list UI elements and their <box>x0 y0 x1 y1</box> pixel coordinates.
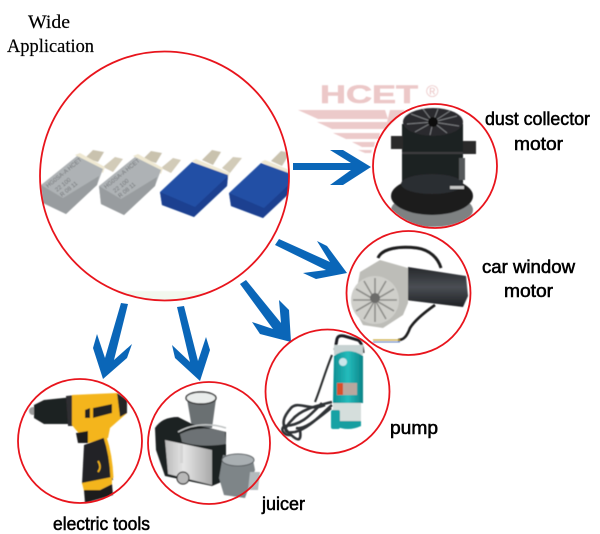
title: Wide <box>28 12 70 33</box>
panel: circuit breakers <box>40 52 311 301</box>
gray breaker one: HG0SA-A HCET <box>45 157 84 190</box>
red ring <box>148 382 270 504</box>
arrow: to car window motor <box>275 239 347 279</box>
label: electric tools: electric tools <box>53 514 150 534</box>
red ring <box>40 52 289 300</box>
blue breaker two <box>228 150 288 219</box>
gray breaker two <box>99 151 181 215</box>
label: dust collector motor: motor <box>514 134 563 154</box>
watermark: HCET logo <box>298 81 439 153</box>
motor illustration <box>391 108 476 227</box>
gray breaker two: R 08 11 <box>117 182 138 200</box>
blue breaker one <box>160 150 242 217</box>
title <box>7 12 94 57</box>
label: car window motor: car window <box>482 257 576 277</box>
panel: pump <box>266 330 390 454</box>
red ring <box>373 104 497 228</box>
gray breaker two: 22 100 <box>112 178 131 195</box>
panel: juicer <box>148 382 270 504</box>
label: car window motor: motor <box>504 281 553 301</box>
gray breaker two: HG0SA-A HCET <box>103 158 142 191</box>
arrow: to electric tools <box>93 303 132 379</box>
watermark: HCET logo: HCET <box>320 81 418 109</box>
pale reflection at circle base <box>120 291 205 300</box>
relay products <box>41 150 311 218</box>
watermark: HCET logo: ® <box>426 82 439 101</box>
panel: electric tools <box>18 379 142 503</box>
title: Application <box>7 36 94 57</box>
drill illustration <box>29 393 127 503</box>
red ring <box>346 231 470 355</box>
red ring <box>266 330 390 454</box>
gray breaker one: 22 100 <box>54 177 73 194</box>
red ring <box>18 379 142 503</box>
motor illustration <box>351 247 468 342</box>
label: dust collector motor: dust collector <box>485 109 590 129</box>
panel: car window motor <box>346 231 470 355</box>
juicer illustration <box>155 392 260 498</box>
label: dust collector motor <box>485 109 590 154</box>
label: car window motor <box>482 257 576 301</box>
gray breaker one <box>41 150 123 214</box>
label: pump: pump <box>390 418 438 438</box>
arrow: to pump <box>240 280 291 342</box>
gray breaker one: R 08 11 <box>59 181 80 199</box>
arrow: to juicer <box>172 306 210 381</box>
arrow: to dust collector motor <box>293 150 371 185</box>
label: juicer: juicer <box>261 494 305 514</box>
pump illustration <box>282 336 363 439</box>
panel: dust collector motor <box>373 104 497 228</box>
